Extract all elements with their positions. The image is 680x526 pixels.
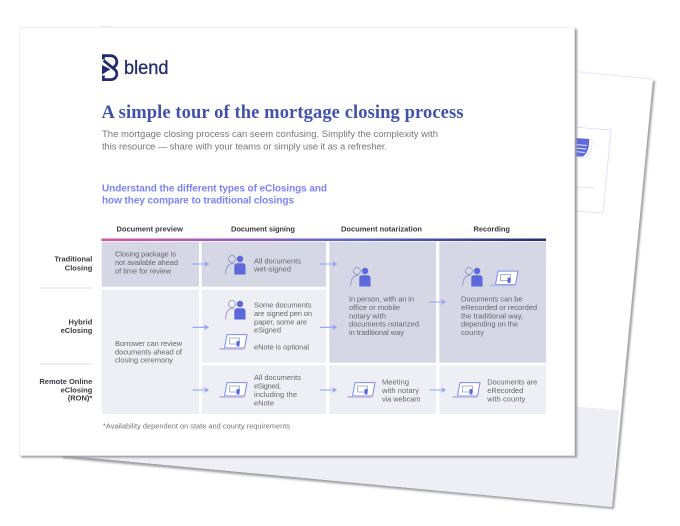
cell: RON recording: eRecorded (487, 386, 523, 395)
cell: traditional and hybrid notarization (329, 242, 436, 363)
cell: traditional and hybrid notarization: office or mobile (349, 303, 400, 312)
cell: hybrid signing: eSigned (254, 326, 281, 335)
cell: traditional signing: wet-signed (253, 265, 291, 274)
cell: RON notarization: with notary (381, 386, 419, 395)
cell: traditional and hybrid notarization: in traditional way (349, 328, 404, 337)
wordmark: blend (124, 58, 168, 79)
intro text (102, 129, 438, 153)
arrows (192, 262, 445, 392)
cell: RON signing: All documents (254, 373, 301, 382)
cell: hybrid signing: are signed pen on (254, 309, 312, 318)
front page (20, 28, 577, 458)
logo (102, 56, 168, 80)
column headers: Document notarization (341, 225, 422, 234)
cell: hybrid signing (202, 289, 326, 363)
footnote: *Availability dependent on state and county requirements (103, 422, 290, 430)
cell: traditional and hybrid recording: the traditional way, (461, 311, 523, 320)
cell: RON notarization (329, 365, 436, 414)
row labels: (RON)* (68, 394, 92, 403)
cell: traditional and hybrid notarization: notary with (349, 311, 386, 320)
cell: traditional and hybrid recording: Documents can be (461, 294, 522, 303)
row labels: eClosing (61, 326, 93, 335)
title: A simple tour of the mortgage closing process (102, 103, 464, 123)
cell: RON signing: eSigned, (254, 382, 281, 391)
icon: shield (568, 138, 592, 158)
cell: hybrid and RON preview (102, 289, 199, 414)
back page divider line (560, 186, 594, 188)
cell: RON recording: Documents are (487, 377, 537, 386)
cell: traditional signing: All documents (254, 256, 301, 265)
cell: RON notarization: Meeting (382, 377, 409, 386)
cell: RON signing: eNote (254, 398, 274, 407)
cell: RON recording (439, 365, 546, 414)
icon: blend mark (102, 56, 117, 80)
cell: traditional and hybrid recording: county (461, 328, 484, 337)
column headers: Document preview (116, 225, 183, 234)
cell: traditional preview: of time for review (115, 266, 172, 275)
cell: RON signing: including the (254, 390, 297, 399)
cell: traditional preview: not available ahead (115, 258, 178, 267)
cell: traditional signing (202, 242, 326, 287)
row labels: Hybrid (69, 318, 93, 327)
cell: traditional preview: Closing package is (115, 250, 176, 259)
cell: traditional and hybrid notarization: documents notarized (349, 320, 419, 329)
front page sheet (20, 28, 574, 456)
back page outlined box (560, 126, 611, 213)
row labels: Remote Online (39, 377, 92, 386)
cell: traditional and hybrid notarization: In person, with an in (349, 294, 414, 303)
back page top edge (100, 26, 653, 79)
front page shadow (21, 29, 577, 458)
cell: hybrid signing: Some documents (254, 300, 312, 309)
cell: RON recording: with county (486, 394, 526, 403)
gradient header bar (102, 238, 546, 241)
column headers (116, 225, 510, 234)
subheading (102, 184, 327, 206)
column headers: Recording (474, 225, 510, 234)
cell: hybrid and RON preview: closing ceremony (115, 356, 173, 365)
cell: traditional and hybrid recording: depending on the (461, 320, 518, 329)
row labels: Closing (65, 263, 93, 272)
back page sheet (60, 26, 653, 507)
intro text: The mortgage closing process can seem confusing. Simplify the complexity with (102, 129, 438, 140)
intro text: this resource — share with your teams or simply use it as a refresher. (102, 142, 387, 153)
cell: traditional preview (102, 242, 199, 287)
row labels: eClosing (61, 386, 93, 395)
cell: hybrid and RON preview: Borrower can review (115, 339, 183, 348)
cell: traditional and hybrid recording (439, 242, 546, 363)
cell: traditional and hybrid recording: eRecorded or recorded (461, 303, 537, 312)
row dividers (40, 288, 92, 364)
row labels: Traditional (54, 255, 92, 264)
cell: RON signing (202, 365, 326, 414)
row labels (39, 255, 93, 403)
cell: hybrid signing: paper, some are (254, 317, 307, 326)
cell: hybrid and RON preview: documents ahead of (115, 347, 183, 356)
subheading: Understand the different types of eClosings and (102, 184, 327, 194)
back page shadow (62, 28, 655, 509)
cell: RON notarization: via webcam (382, 394, 420, 403)
column headers: Document signing (231, 225, 295, 234)
back page grey footer band (60, 370, 619, 507)
subheading: how they compare to traditional closings (102, 196, 294, 206)
cell: hybrid signing: eNote is optional (254, 342, 309, 351)
